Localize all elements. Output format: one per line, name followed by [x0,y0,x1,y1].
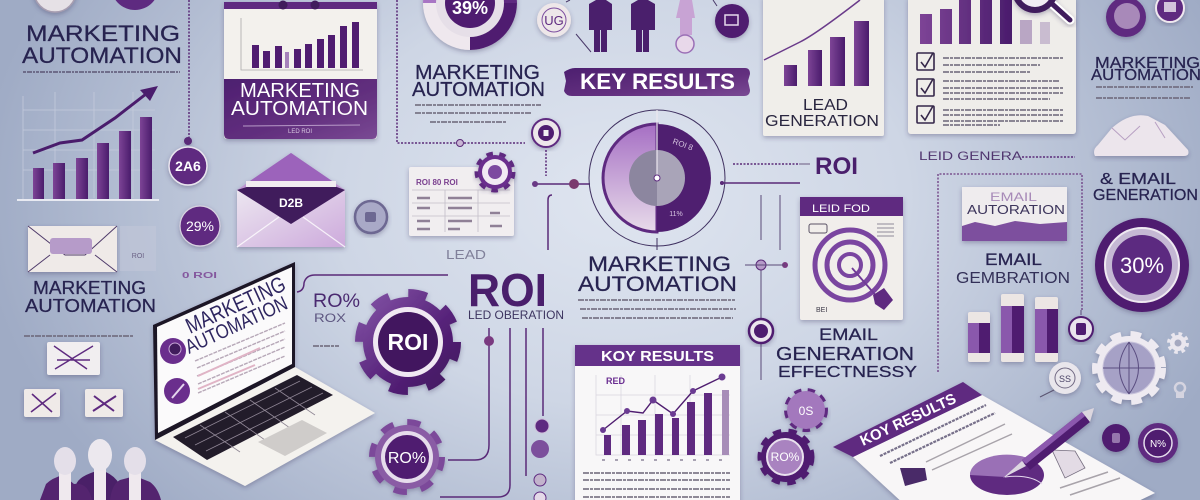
heading: marketing automation lower left [24,278,156,336]
checklist text lines [943,58,1063,125]
top donut 39% [423,0,517,50]
30% badge: 30% [1120,253,1164,278]
gear icon RO% [761,432,811,482]
round purple icon with percent: N% [1150,439,1166,450]
line chart with rising arrow [17,86,159,201]
laptop screen text: AUTOMATION [182,293,291,359]
label: LEID GENERA: LEID GENERA [919,149,1022,163]
heading: email gembration: GEMBRATION [956,270,1070,287]
label: RO%: ROX [314,311,346,325]
gear icon 0% [787,391,825,429]
card: marketing automation bar chart: MARKETING [240,80,360,102]
3D bar icons [968,294,1058,362]
small gear on table [478,155,512,189]
laptop [153,262,375,486]
table card [409,167,514,236]
connector line to ROI [297,275,448,292]
table card: ROI 80 ROI [416,178,458,187]
key results document: KOY RESULTS [858,390,959,450]
heading: & email generation [1093,171,1198,204]
ROI gear: ROI [388,329,428,355]
target card: BEI [816,307,827,314]
label: RO%: RO% [313,291,360,312]
top right circle icon [1106,0,1146,37]
icon: mountain shape [1094,115,1188,156]
icon: person 2 [631,0,655,52]
round icon: UG: UG [544,13,564,28]
heading: marketing automation top right: MARKETING [1095,55,1200,72]
heading: marketing automation lower left: AUTOMATION [25,296,156,316]
heading: email generation effectiveness: EMAIL [819,325,878,344]
laptop screen text [182,271,291,393]
card: marketing automation bar chart: LED ROI [288,129,312,135]
laptop screen icons [160,338,190,404]
target card: LEID FOD [812,203,870,215]
badge 2A6: 2A6 [175,158,201,174]
small round icon with glyphs: SS [1059,374,1071,384]
heading: & email generation: GENERATION [1093,187,1198,204]
label: RO% [313,291,360,346]
badge 2A6 [169,137,207,185]
heading: marketing automation top right: AUTOMATION [1091,67,1200,84]
heading: marketing automation lower left: MARKETING [33,278,146,298]
icon: three business people [40,439,161,500]
RO% gear [373,423,441,491]
connector with nodes to donut [532,179,590,250]
small white gear [1169,334,1187,352]
laptop screen text: MARKETING [182,271,289,339]
pen [1003,408,1094,478]
big ROI heading: ROI [468,264,547,316]
connector lines left of donut [397,0,525,146]
gear icon RO%: RO% [771,450,800,464]
heading: marketing automation top right [1091,55,1200,98]
round icon: UG [537,3,571,37]
RO% gear: RO% [388,450,426,467]
heading: marketing automation top left: MARKETING [26,21,180,46]
label: LEAD: LEAD [446,247,486,262]
key results chart card: KOY RESULTS [601,348,714,365]
heading: marketing automation center: AUTOMATION [578,273,737,296]
heading: marketing automation top left: AUTOMATION [22,43,182,68]
30% badge [1095,218,1189,312]
top-left purple circle [111,0,159,10]
big globe gear [1097,336,1161,400]
checklist card [908,0,1076,134]
banner: key results: KEY RESULTS [580,69,735,94]
connector lines from ROI [440,328,549,500]
heading: marketing automation top left [22,21,182,72]
connector strokes between icons [566,0,717,52]
key results document [833,382,1155,500]
gear icon 0%: 0S [799,404,813,418]
small label: 0 ROI [182,271,217,280]
round dark icon [1102,424,1130,452]
key results chart card [575,345,740,500]
heading: marketing automation top center: AUTOMATION [412,79,545,101]
target icon [815,230,885,300]
card: marketing automation bar chart: AUTOMATION [231,98,368,120]
heading: marketing automation center: MARKETING [588,253,731,276]
key results chart card: RED [606,376,626,386]
round icon: dark [715,4,749,38]
round purple icon with percent [1138,423,1178,463]
icon: large envelope [237,153,345,247]
heading: marketing automation top center: MARKETING [415,62,540,84]
icon: light person with badge [676,0,695,53]
dotted connector to badge [188,0,190,138]
lead generation card: LEAD [803,97,848,114]
dashed frame [938,174,1082,372]
heading: email gembration [956,250,1070,287]
magnifier icon [1015,0,1070,20]
heading: email generation effectiveness: EFFECTNESSY [778,364,917,381]
email automation card: EMAIL [990,190,1037,204]
badge 29%: 29% [186,218,214,234]
target card [800,197,903,320]
small envelope card [28,226,117,272]
lead generation card [763,0,884,136]
key-like small icon [1175,383,1185,398]
top-left partial pie icon [34,0,76,12]
checkboxes [917,53,934,123]
icon: large envelope: D2B [279,196,303,210]
ghost panel [120,226,156,271]
heading: & email generation: & EMAIL [1100,171,1176,188]
lead generation card: GENERATION [765,113,879,130]
heading: email gembration: EMAIL [985,250,1042,269]
icon: person 1 [589,0,612,52]
email automation card: AUTORATION [967,202,1065,217]
ROI gear [361,295,455,389]
heading: email generation effectiveness: GENERATION [776,344,914,364]
connector to table [545,150,547,176]
small round icon [1069,317,1093,341]
heading: marketing automation top center [412,62,545,122]
ghost panel: ROI [132,253,144,260]
connector to small icon [1080,310,1082,315]
card: marketing automation bar chart [224,0,377,139]
icon: round grey button [355,201,387,233]
heading: email generation effectiveness [776,325,917,381]
connector lines right of donut [720,164,800,380]
heading: marketing automation center [578,253,737,318]
small round icon with glyphs [1040,362,1081,397]
email automation card [962,187,1067,241]
round icon [749,319,773,343]
donut chart center: 11% [669,211,683,218]
label: ROI: ROI [815,153,858,180]
donut chart center [589,110,725,250]
big ROI heading: LED OBERATION [468,308,564,322]
icons: mail envelopes [24,342,123,417]
badge 29% [180,206,220,246]
donut chart center: ROI 8 [671,137,695,153]
top right badge icon [1156,0,1184,22]
round lock icon [532,119,560,147]
